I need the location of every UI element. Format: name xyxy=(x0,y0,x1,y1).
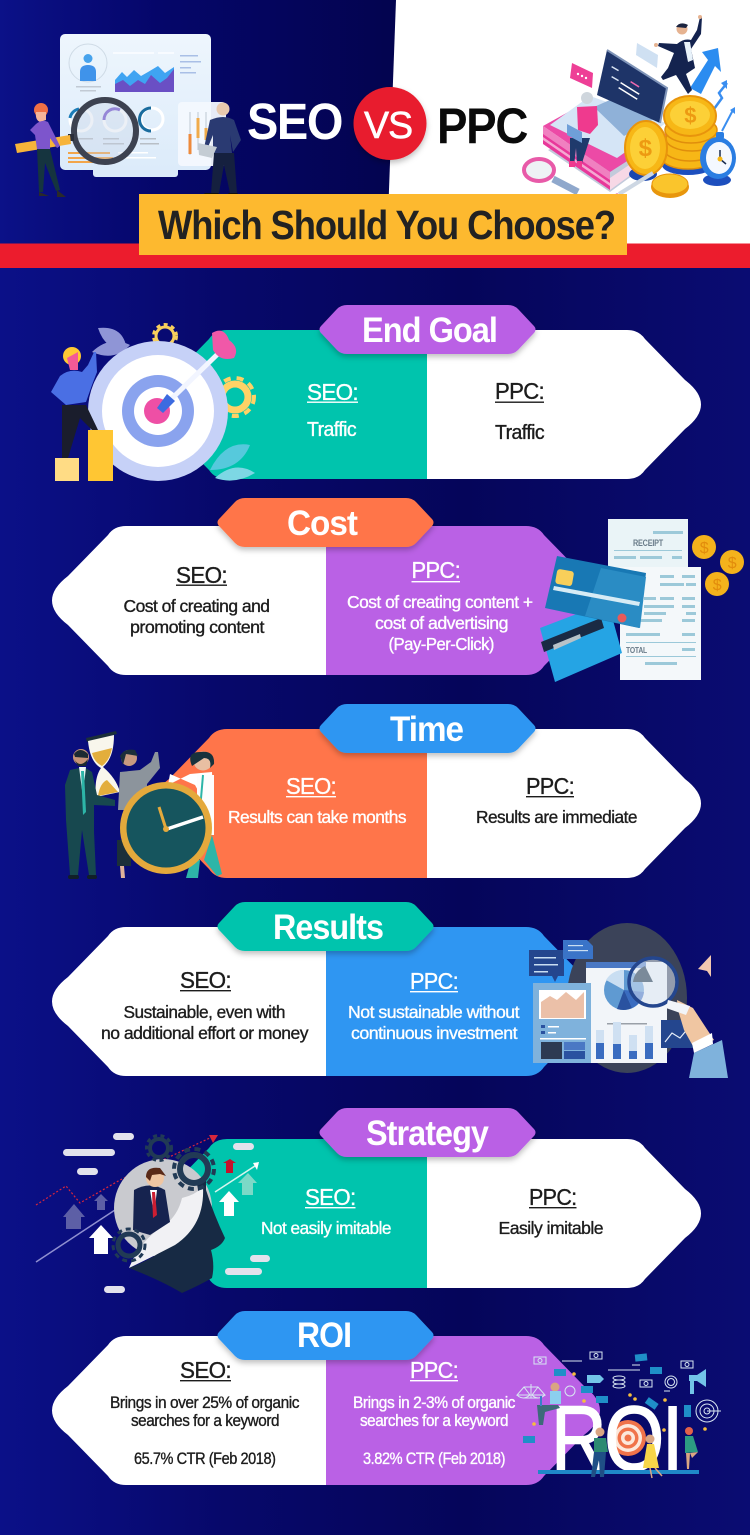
chat bubble xyxy=(570,63,593,88)
illustration: receipt and cards: TOTAL xyxy=(626,646,647,655)
tag: End Goal xyxy=(320,305,536,354)
VS badge: VS xyxy=(364,105,412,147)
figure: man in suit xyxy=(198,102,241,196)
text: PPC column: cost of advertising xyxy=(375,613,508,633)
heading: PPC: PPC xyxy=(437,98,527,154)
tag: Results xyxy=(218,902,434,951)
illustration: receipt and cards: $ xyxy=(700,540,709,557)
text: PPC column xyxy=(348,968,520,1043)
text: PPC column xyxy=(353,1357,515,1468)
small blue arrows xyxy=(714,83,727,109)
left illustration: dashboard analysts xyxy=(15,34,241,197)
tag: ROI xyxy=(218,1311,434,1360)
figure: woman with ruler xyxy=(15,103,71,197)
tag: ROI: ROI xyxy=(297,1316,351,1355)
text: SEO column: searches for a keyword xyxy=(131,1412,279,1430)
woman xyxy=(121,750,137,766)
pink magnifier xyxy=(553,179,578,192)
text: PPC column: Easily imitable xyxy=(498,1218,603,1238)
text: SEO column xyxy=(101,967,309,1043)
text: SEO column xyxy=(307,379,358,441)
panel: Strategy xyxy=(36,1108,701,1293)
stopwatch xyxy=(703,174,731,186)
gold coin stack xyxy=(662,155,714,175)
text: PPC column: PPC: xyxy=(412,557,460,583)
coin: left xyxy=(629,167,657,181)
VS badge xyxy=(354,87,426,160)
laptop xyxy=(550,96,666,158)
right illustration: laptop and coins xyxy=(524,15,736,198)
illustration: receipt and cards xyxy=(540,519,744,682)
text: SEO column: SEO: xyxy=(180,1357,231,1383)
text: SEO column: 65.7% CTR (Feb 2018) xyxy=(134,1450,276,1468)
text: PPC column: Not sustainable without xyxy=(348,1002,520,1022)
tag: Time xyxy=(320,704,536,753)
icon: magnifying glass xyxy=(68,100,136,162)
illustration: receipt and cards: $ xyxy=(728,555,737,572)
text: SEO column: SEO: xyxy=(307,379,358,405)
text: PPC column: Cost of creating content + xyxy=(347,592,533,612)
panel: End Goal xyxy=(51,305,701,481)
seated woman xyxy=(581,92,593,104)
title banner: Which Should You Choose? xyxy=(158,202,615,248)
text: SEO column: Brings in over 25% of organic xyxy=(110,1394,299,1412)
text: SEO column: Not easily imitable xyxy=(261,1218,391,1238)
clock xyxy=(120,782,212,874)
text: SEO column: SEO: xyxy=(286,773,336,799)
text: PPC column: searches for a keyword xyxy=(360,1412,508,1430)
text: SEO column: Results can take months xyxy=(228,807,407,827)
header xyxy=(0,0,750,268)
panel: ROI xyxy=(52,1311,721,1490)
red band xyxy=(0,244,750,268)
text: PPC column: Brings in 2-3% of organic xyxy=(353,1394,515,1412)
small coin xyxy=(651,176,689,198)
illustration: ROI lettering with people and icons xyxy=(517,1352,721,1490)
tag: Strategy: Strategy xyxy=(366,1114,489,1153)
text: SEO column: SEO: xyxy=(180,967,231,993)
grey card xyxy=(636,43,658,68)
text: SEO column: SEO: xyxy=(176,562,227,588)
left man xyxy=(73,749,89,765)
tag: Cost xyxy=(218,498,434,547)
target in the O xyxy=(610,1420,646,1456)
illustration: head with businessman and arrows xyxy=(36,1133,270,1293)
hourglass xyxy=(86,731,117,742)
text: PPC column: PPC: xyxy=(495,378,544,404)
text: SEO column: SEO: xyxy=(305,1184,356,1210)
text: PPC column: Traffic xyxy=(495,422,545,444)
heading: SEO: SEO xyxy=(247,93,342,150)
jumping man xyxy=(676,24,688,34)
text: SEO column: Traffic xyxy=(307,419,357,441)
text: PPC column: Results are immediate xyxy=(476,807,637,827)
title banner xyxy=(139,194,627,255)
tag: Results: Results xyxy=(273,908,384,947)
text: SEO column: promoting content xyxy=(130,617,265,637)
text: PPC column: (Pay-Per-Click) xyxy=(388,634,494,654)
text: PPC column: continuous investment xyxy=(351,1023,518,1043)
panel: Results xyxy=(52,902,728,1078)
seated person with laptop xyxy=(537,1382,561,1425)
tag: Strategy xyxy=(320,1108,536,1157)
tag: Time: Time xyxy=(390,710,464,749)
text: SEO column: no additional effort or money xyxy=(101,1023,309,1043)
text: PPC column: 3.82% CTR (Feb 2018) xyxy=(363,1450,505,1468)
illustration: target with person xyxy=(51,324,255,481)
right illustration: laptop and coins: $ xyxy=(684,103,696,128)
text: PPC column xyxy=(495,378,545,444)
tag: Cost: Cost xyxy=(287,504,358,543)
illustration: ROI lettering with people and icons: ROI xyxy=(551,1388,681,1490)
illustration: receipt and cards: $ xyxy=(713,577,722,594)
illustration: analytics dashboard xyxy=(529,923,728,1078)
woman in yellow dress xyxy=(643,1434,662,1478)
pencil xyxy=(619,173,653,194)
woman in green xyxy=(685,1427,698,1469)
text: PPC column xyxy=(498,1184,603,1238)
panel: Time xyxy=(65,704,701,879)
text: PPC column xyxy=(347,557,533,654)
illustration: team with clock and hourglass xyxy=(65,731,222,879)
text: PPC column: PPC: xyxy=(410,968,458,994)
text: SEO column: Cost of creating and xyxy=(124,596,270,616)
big arrow xyxy=(690,48,721,94)
tag: End Goal: End Goal xyxy=(362,311,497,350)
text: PPC column: PPC: xyxy=(529,1184,576,1210)
illustration: receipt and cards: RECEIPT xyxy=(633,538,664,548)
panel: Cost xyxy=(52,498,744,682)
text: SEO column xyxy=(261,1184,391,1238)
text: PPC column xyxy=(476,773,637,827)
text: PPC column: PPC: xyxy=(410,1357,458,1383)
text: PPC column: PPC: xyxy=(526,773,574,799)
books xyxy=(543,132,610,190)
text: SEO column xyxy=(110,1357,299,1468)
right illustration: laptop and coins: $ xyxy=(639,135,653,162)
text: SEO column: Sustainable, even with xyxy=(124,1002,285,1022)
right man xyxy=(194,752,212,770)
standing man xyxy=(591,1428,608,1477)
text: SEO column xyxy=(124,562,270,637)
text: SEO column xyxy=(228,773,407,827)
